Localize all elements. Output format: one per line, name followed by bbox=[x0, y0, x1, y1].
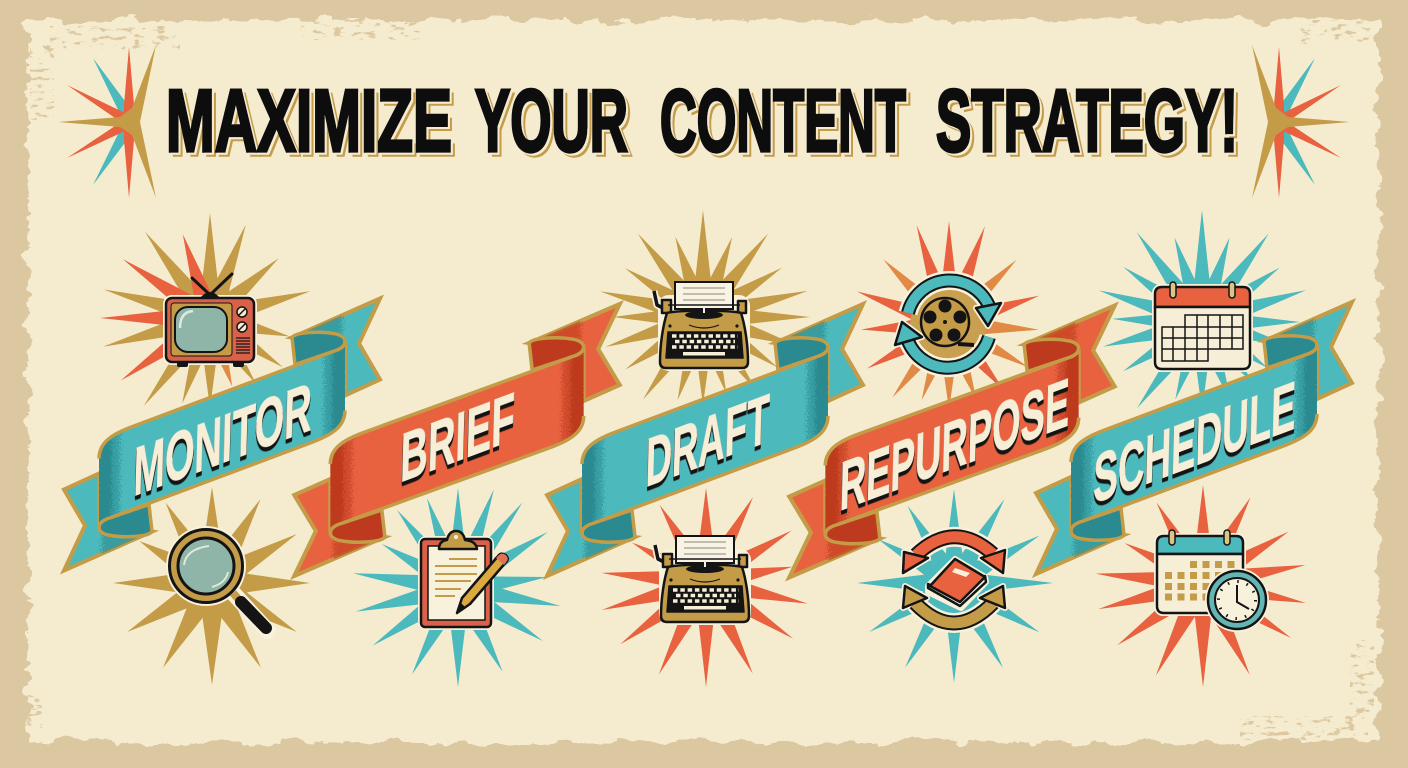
starburst: magnifier bbox=[113, 487, 310, 685]
icon: typewriter top bbox=[654, 282, 748, 368]
label: brief: BRIEF bbox=[399, 378, 516, 498]
icon: magnifying glass bbox=[166, 526, 268, 631]
starburst: schedule top bbox=[1095, 210, 1310, 415]
starburst: draft top bbox=[597, 210, 811, 407]
icon: clipboard and pencil bbox=[421, 531, 508, 627]
icon: retro television bbox=[166, 274, 254, 367]
label: monitor: MONITOR bbox=[133, 369, 313, 512]
starburst: repurpose top bbox=[853, 221, 1043, 410]
label: draft: DRAFT bbox=[645, 380, 770, 503]
title: YOUR bbox=[475, 71, 628, 170]
starburst: title right bbox=[1252, 45, 1350, 198]
starburst: schedule bottom bbox=[1094, 485, 1308, 687]
starburst: draft bottom bbox=[599, 488, 810, 687]
starburst: monitor bbox=[100, 213, 314, 413]
icon: calendar with clock bbox=[1157, 530, 1269, 632]
ribbon: draft bbox=[547, 304, 863, 576]
icon: film reel with cycle arrows bbox=[895, 280, 1001, 368]
ribbon: schedule bbox=[1036, 302, 1352, 574]
starburst: repurpose bottom bbox=[857, 489, 1053, 683]
title: CONTENT bbox=[660, 71, 906, 170]
title bbox=[166, 71, 1238, 170]
icon: wall calendar bbox=[1155, 282, 1250, 369]
label: repurpose: REPURPOSE bbox=[839, 364, 1070, 526]
icon: typewriter bottom bbox=[655, 536, 749, 622]
ribbon: repurpose bbox=[789, 306, 1115, 578]
title: MAXIMIZE bbox=[166, 71, 452, 170]
ribbon: monitor bbox=[64, 298, 380, 570]
icon: book with cycle arrows bbox=[903, 537, 1005, 623]
ribbon: brief bbox=[294, 304, 620, 576]
starburst: brief bbox=[351, 485, 563, 687]
starburst: title left bbox=[58, 45, 156, 198]
